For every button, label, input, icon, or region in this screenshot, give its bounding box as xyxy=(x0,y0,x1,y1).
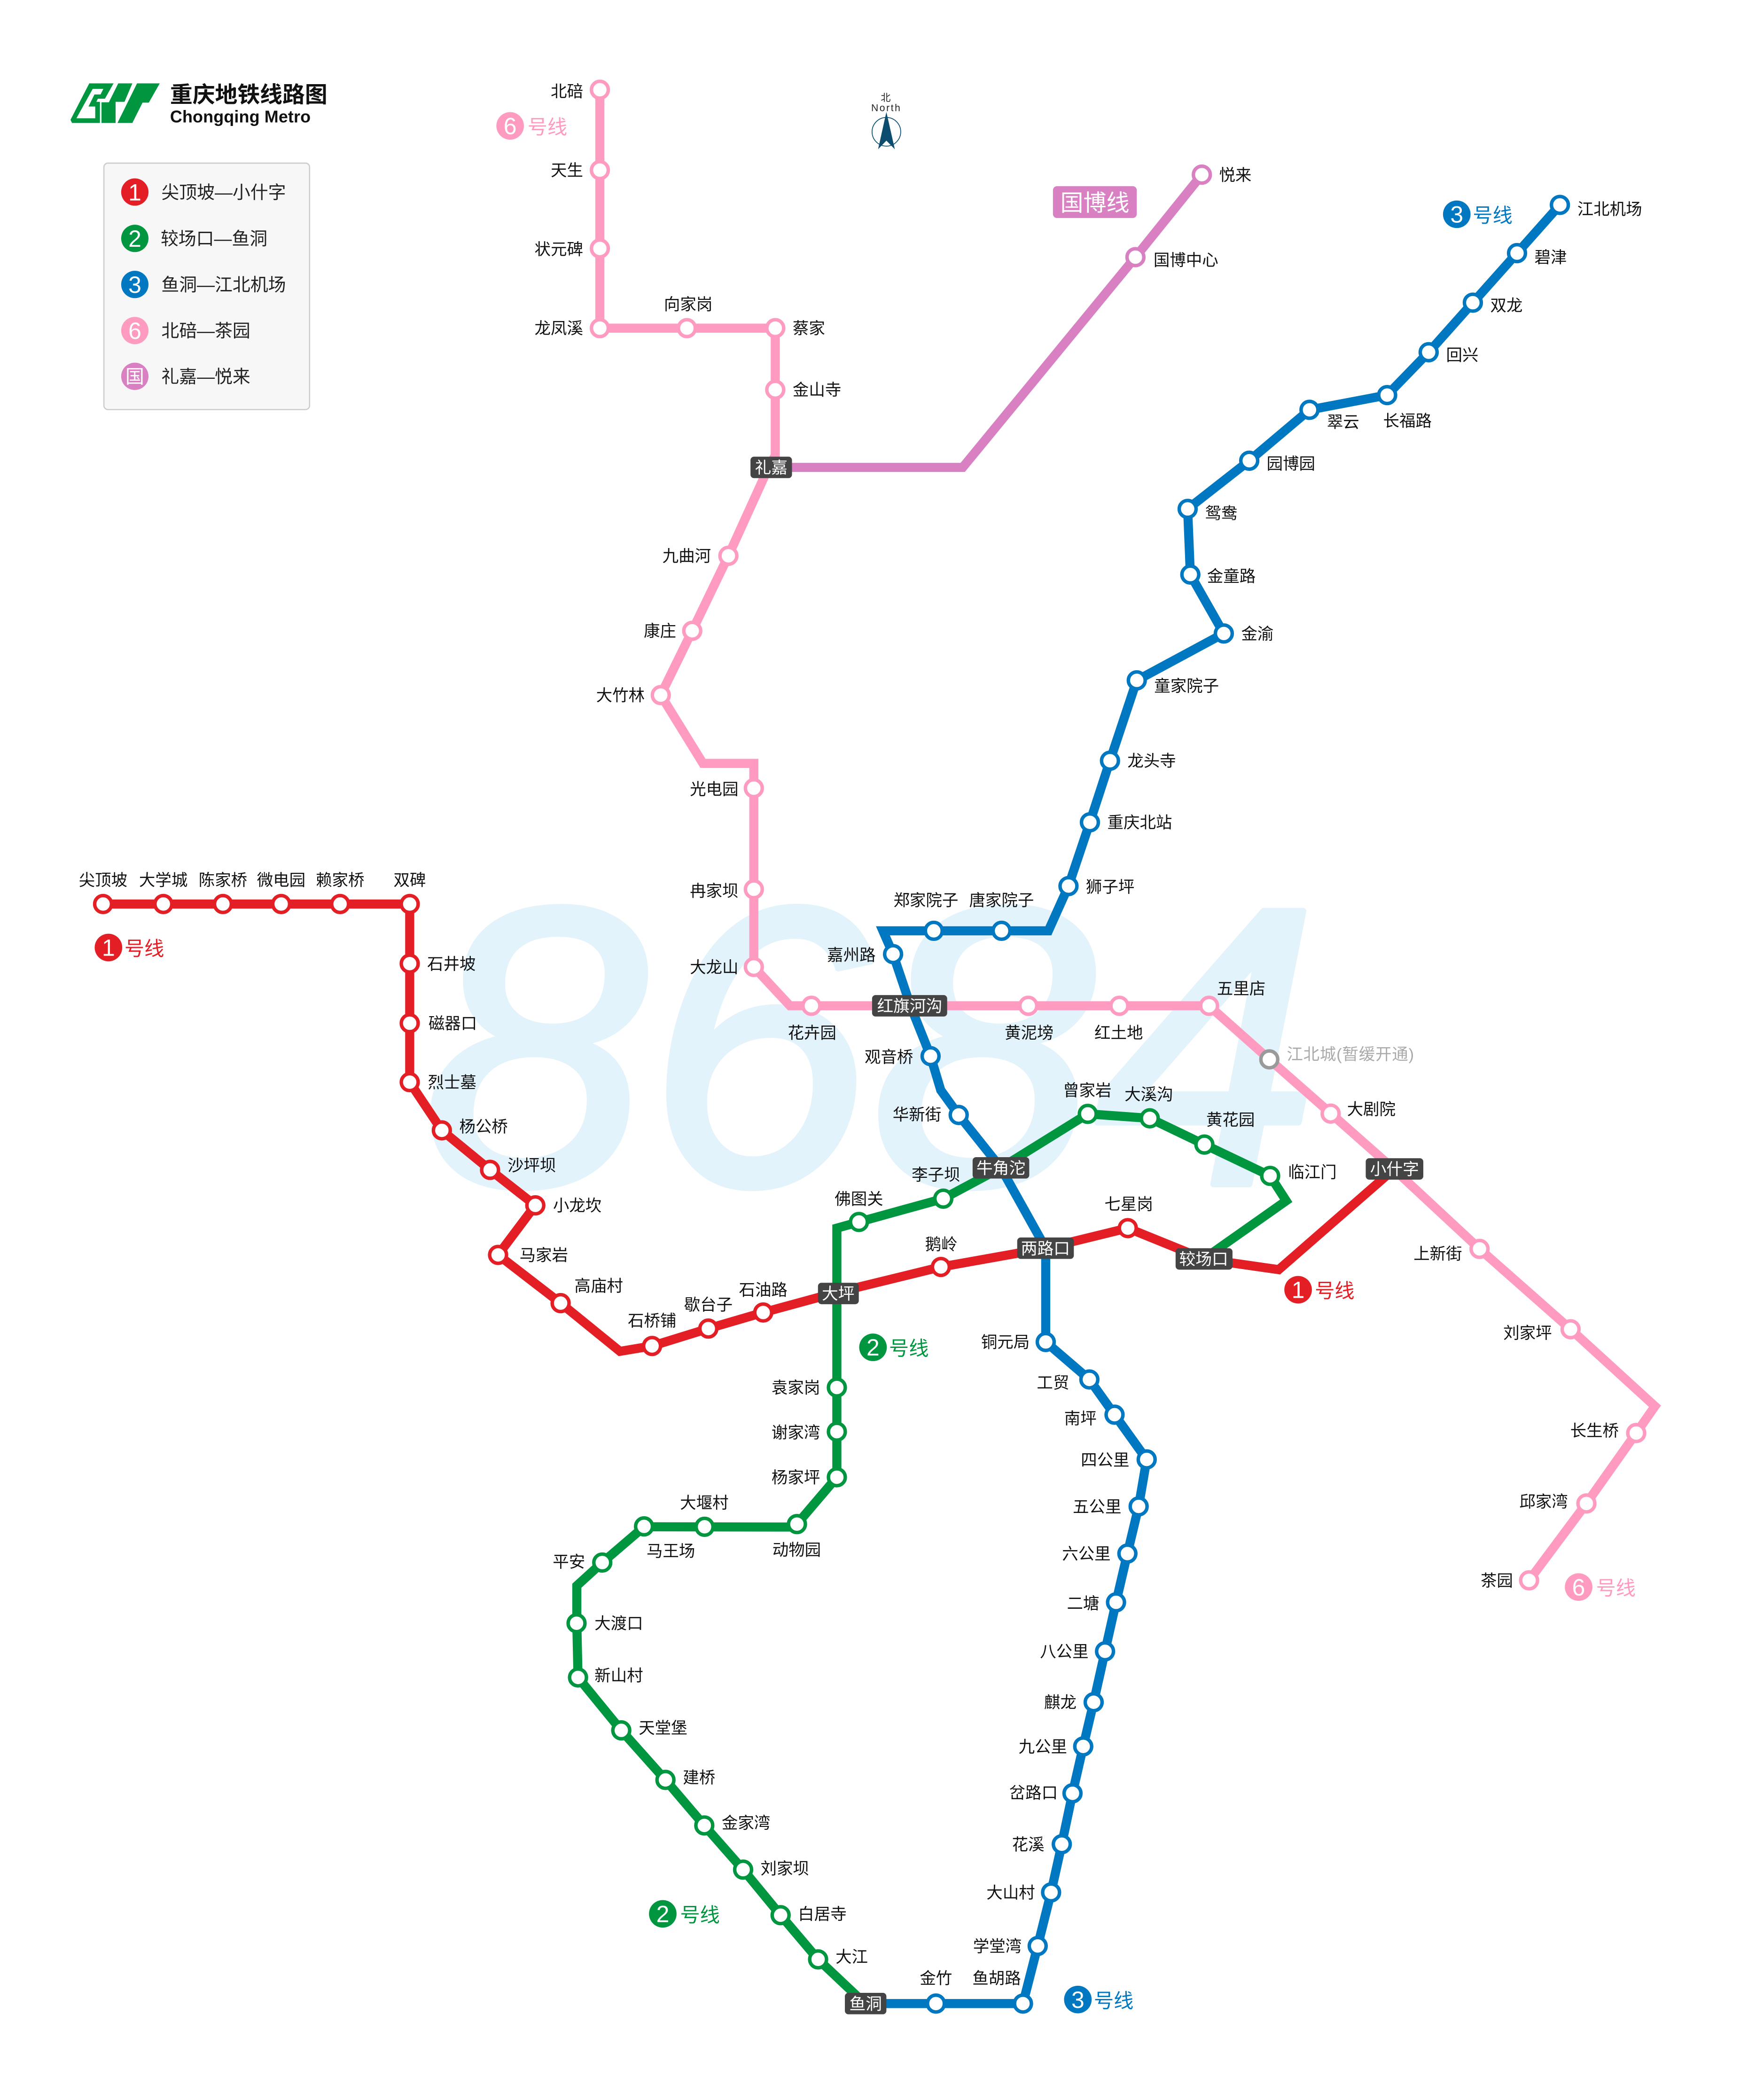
station 白居寺 xyxy=(772,1905,847,1924)
legend item: line 6: 6 xyxy=(128,318,141,344)
line label: 3号线 (north): 号线 xyxy=(1473,204,1513,227)
legend item: line 1 xyxy=(121,179,286,206)
station 天堂堡: 天堂堡 xyxy=(639,1719,687,1737)
station 杨公桥: 杨公桥 xyxy=(459,1118,508,1136)
interchange: 大坪: 大坪 xyxy=(822,1285,855,1303)
station 冉家坝 xyxy=(690,881,762,900)
station 金童路 xyxy=(1182,566,1256,586)
station 马家岩: 马家岩 xyxy=(520,1247,568,1265)
station 鹅岭 xyxy=(925,1236,958,1276)
line label: 2号线 (north): 2 xyxy=(866,1334,880,1361)
station 天生 xyxy=(551,162,609,180)
north arrow xyxy=(871,92,901,149)
station 李子坝 xyxy=(912,1167,960,1207)
line label: 2号线 (south) xyxy=(649,1900,720,1928)
legend item: Guobo line: 国 xyxy=(125,367,144,387)
station 江北城 (suspended): 江北城(暂缓开通) xyxy=(1287,1046,1414,1064)
station 翠云: 翠云 xyxy=(1327,414,1359,431)
station 马王场: 马王场 xyxy=(647,1543,695,1560)
station 康庄 xyxy=(644,622,701,641)
interchange: 礼嘉: 礼嘉 xyxy=(755,459,788,477)
station 陈家桥: 陈家桥 xyxy=(199,872,247,890)
station 金竹 xyxy=(920,1970,952,2012)
station 南坪 xyxy=(1064,1406,1123,1428)
station 九曲河: 九曲河 xyxy=(663,548,711,565)
station 大剧院 xyxy=(1322,1101,1396,1122)
station 观音桥 xyxy=(865,1048,939,1066)
station 歇台子: 歇台子 xyxy=(684,1296,733,1314)
station 九公里: 九公里 xyxy=(1019,1738,1067,1756)
station 五里店 xyxy=(1201,980,1265,1014)
station 大山村: 大山村 xyxy=(986,1884,1035,1902)
station 刘家坝 xyxy=(735,1860,809,1878)
station 四公里 xyxy=(1081,1451,1155,1469)
station 磁器口 xyxy=(401,1015,477,1033)
station 状元碑: 状元碑 xyxy=(535,241,583,259)
station 长生桥: 长生桥 xyxy=(1570,1422,1619,1440)
station 大江 xyxy=(810,1949,868,1968)
interchange: 两路口: 两路口 xyxy=(1021,1239,1070,1258)
station 建桥: 建桥 xyxy=(683,1769,715,1787)
title: 重庆地铁线路图: 重庆地铁线路图 xyxy=(170,83,328,108)
station 四公里: 四公里 xyxy=(1081,1451,1130,1469)
north arrow: North xyxy=(871,103,900,114)
station 郑家院子: 郑家院子 xyxy=(893,892,958,909)
station 金山寺: 金山寺 xyxy=(793,382,841,400)
legend item: line 2: 较场口—鱼洞 xyxy=(161,229,267,249)
line label: 6号线 (north): 号线 xyxy=(528,116,567,138)
station 杨家坪: 杨家坪 xyxy=(772,1469,820,1487)
station 龙凤溪: 龙凤溪 xyxy=(535,320,583,338)
station 学堂湾: 学堂湾 xyxy=(973,1938,1022,1956)
station 麒龙 xyxy=(1044,1694,1102,1712)
legend item: line 2 xyxy=(121,225,267,252)
station 石桥铺 xyxy=(628,1312,676,1355)
station 长福路: 长福路 xyxy=(1383,412,1432,430)
station 石油路 xyxy=(739,1282,788,1321)
station 冉家坝: 冉家坝 xyxy=(690,882,738,900)
station 大溪沟 xyxy=(1124,1086,1173,1127)
interchange: 鱼洞 xyxy=(845,1993,886,2014)
station 红土地 xyxy=(1094,997,1143,1042)
station 大龙山 xyxy=(690,958,762,977)
station 悦来 xyxy=(1194,166,1251,185)
interchange: 礼嘉 xyxy=(750,457,792,478)
station 邱家湾 xyxy=(1519,1493,1595,1512)
station 花溪: 花溪 xyxy=(1012,1836,1045,1854)
station 翠云 xyxy=(1301,401,1359,431)
line label: 2号线 (north): 号线 xyxy=(889,1338,929,1360)
station 马家岩 xyxy=(490,1246,568,1265)
line label: 3号线 (south): 号线 xyxy=(1094,1990,1133,2012)
station 长福路 xyxy=(1379,387,1432,430)
station 鱼胡路: 鱼胡路 xyxy=(972,1970,1021,1988)
legend item: line 2: 2 xyxy=(128,226,141,252)
station 嘉州路: 嘉州路 xyxy=(827,947,876,964)
station 沙坪坝: 沙坪坝 xyxy=(507,1157,556,1175)
station 鹅岭: 鹅岭 xyxy=(925,1236,958,1254)
line label: 3号线 (north): 3 xyxy=(1450,202,1463,228)
station 天生: 天生 xyxy=(551,162,583,180)
route: Guobo line xyxy=(771,175,1202,467)
station 童家院子 xyxy=(1128,672,1219,695)
station 小龙坎 xyxy=(527,1197,601,1215)
station 鱼胡路 xyxy=(972,1970,1031,2012)
station 尖顶坡: 尖顶坡 xyxy=(79,872,127,890)
station 陈家桥 xyxy=(199,872,247,912)
station 六公里: 六公里 xyxy=(1062,1545,1111,1563)
legend item: line 3: 3 xyxy=(128,272,141,298)
station 龙凤溪 xyxy=(535,320,609,338)
station 北碚 xyxy=(551,81,609,101)
station 邱家湾: 邱家湾 xyxy=(1519,1493,1568,1511)
station 二塘 xyxy=(1067,1594,1124,1613)
north arrow: 北 xyxy=(881,92,890,103)
station 佛图关 xyxy=(835,1191,883,1230)
line label: 3号线 (north) xyxy=(1443,201,1513,228)
station 谢家湾: 谢家湾 xyxy=(772,1424,820,1442)
station 大学城: 大学城 xyxy=(139,872,187,890)
legend item: line 1: 1 xyxy=(128,179,141,205)
line label: 6号线 (north) xyxy=(496,112,567,140)
station 碧津: 碧津 xyxy=(1535,249,1567,267)
interchange: 红旗河沟: 红旗河沟 xyxy=(877,997,942,1016)
station 刘家坪: 刘家坪 xyxy=(1503,1324,1552,1342)
line label: 2号线 (south): 2 xyxy=(656,1901,669,1928)
legend item: line 6: 北碚—茶园 xyxy=(161,321,250,341)
subtitle: Chongqing Metro: Chongqing Metro xyxy=(170,108,311,126)
legend item: line 6 xyxy=(121,317,250,344)
station 江北机场 xyxy=(1552,196,1642,219)
station 悦来: 悦来 xyxy=(1219,167,1251,185)
station 五公里: 五公里 xyxy=(1073,1498,1121,1516)
station 园博园: 园博园 xyxy=(1267,455,1315,473)
station 五公里 xyxy=(1073,1498,1147,1516)
stations: line 1 xyxy=(79,872,1153,1355)
line label: 3号线 (south): 3 xyxy=(1071,1987,1085,2013)
station 双龙 xyxy=(1464,294,1522,315)
station 茶园 xyxy=(1481,1572,1537,1590)
station 向家岗: 向家岗 xyxy=(664,296,712,313)
station 大学城 xyxy=(139,872,187,912)
line label: 2号线 (south): 号线 xyxy=(680,1904,720,1926)
station 大渡口 xyxy=(568,1615,643,1633)
station 高庙村 xyxy=(552,1277,623,1312)
station 大竹林 xyxy=(596,687,669,705)
station 金山寺 xyxy=(767,381,841,400)
station 烈士墓: 烈士墓 xyxy=(428,1074,476,1092)
station 六公里 xyxy=(1062,1545,1136,1563)
station 童家院子: 童家院子 xyxy=(1154,677,1219,695)
interchange: 牛角沱: 牛角沱 xyxy=(976,1159,1025,1177)
station 花溪 xyxy=(1012,1836,1070,1854)
station 临江门: 临江门 xyxy=(1288,1164,1337,1182)
line label: 国博线 xyxy=(1053,186,1137,218)
interchange: 小什字: 小什字 xyxy=(1370,1160,1419,1179)
station 回兴: 回兴 xyxy=(1446,347,1478,365)
station 回兴 xyxy=(1420,344,1478,365)
station 光电园: 光电园 xyxy=(690,781,738,799)
station 大溪沟: 大溪沟 xyxy=(1124,1086,1173,1104)
station 李子坝: 李子坝 xyxy=(912,1167,960,1184)
interchange: 鱼洞: 鱼洞 xyxy=(849,1995,882,2013)
station 工贸 xyxy=(1037,1371,1098,1392)
station 重庆北站: 重庆北站 xyxy=(1108,814,1172,832)
station 大江: 大江 xyxy=(835,1949,868,1967)
station 金家湾 xyxy=(696,1815,770,1834)
station 狮子坪: 狮子坪 xyxy=(1086,878,1134,896)
station 蔡家: 蔡家 xyxy=(793,320,825,338)
station 华新街: 华新街 xyxy=(893,1106,941,1124)
station 金家湾: 金家湾 xyxy=(722,1815,770,1833)
line label: 6号线 (north): 6 xyxy=(504,113,517,140)
station 郑家院子 xyxy=(893,892,958,939)
route: line 3 xyxy=(865,205,1560,2004)
station 华新街 xyxy=(893,1106,967,1124)
station 国博中心: 国博中心 xyxy=(1154,251,1218,269)
station 石井坡 xyxy=(401,955,476,973)
station 向家岗 xyxy=(664,296,712,337)
station 龙头寺 xyxy=(1101,752,1176,770)
station 金童路: 金童路 xyxy=(1207,568,1256,586)
station 大剧院: 大剧院 xyxy=(1347,1101,1396,1119)
station 南坪: 南坪 xyxy=(1064,1410,1097,1428)
station 学堂湾 xyxy=(973,1937,1046,1956)
station 曾家岩 xyxy=(1063,1082,1111,1122)
legend panel xyxy=(104,163,310,409)
station 建桥 xyxy=(657,1769,715,1788)
station 唐家院子: 唐家院子 xyxy=(969,892,1034,909)
station 杨家坪 xyxy=(772,1469,845,1487)
station 七星岗 xyxy=(1104,1196,1153,1237)
stations: Guobo line xyxy=(1127,166,1251,269)
station 动物园 xyxy=(773,1516,821,1559)
station 天堂堡 xyxy=(613,1719,687,1739)
line label: 国博线: 国博线 xyxy=(1061,191,1130,216)
station 新山村: 新山村 xyxy=(594,1667,643,1685)
station 麒龙: 麒龙 xyxy=(1044,1694,1077,1712)
station 袁家岗: 袁家岗 xyxy=(772,1379,820,1397)
station 微电园: 微电园 xyxy=(257,872,305,890)
line label: 6号线 (south): 号线 xyxy=(1596,1577,1636,1599)
station 鸳鸯 xyxy=(1179,501,1237,523)
station 谢家湾 xyxy=(772,1423,845,1442)
station 二塘: 二塘 xyxy=(1067,1595,1099,1613)
station 石油路: 石油路 xyxy=(739,1282,788,1300)
station 岔路口 xyxy=(1009,1785,1081,1802)
station 平安: 平安 xyxy=(553,1553,585,1571)
station 微电园 xyxy=(257,872,305,912)
station 小龙坎: 小龙坎 xyxy=(553,1197,601,1215)
station 江北城 (suspended) xyxy=(1261,1046,1414,1068)
station 赖家桥: 赖家桥 xyxy=(316,872,364,890)
station 金竹: 金竹 xyxy=(920,1970,952,1988)
station 八公里: 八公里 xyxy=(1040,1643,1089,1661)
line label: 1号线 (west): 号线 xyxy=(125,938,164,960)
station 金渝: 金渝 xyxy=(1241,625,1273,643)
station 金渝 xyxy=(1215,625,1273,643)
station 国博中心 xyxy=(1127,249,1218,269)
station 黄花园 xyxy=(1196,1112,1255,1153)
station 大堰村 xyxy=(680,1495,729,1535)
station 花卉园 xyxy=(788,997,836,1042)
station 铜元局 xyxy=(981,1333,1054,1352)
station 上新街 xyxy=(1413,1240,1488,1263)
station 刘家坝: 刘家坝 xyxy=(761,1860,809,1878)
route: line 1 xyxy=(103,904,1394,1351)
route: line 2 xyxy=(577,1114,1286,2004)
station 歇台子 xyxy=(684,1296,733,1337)
interchange: 大坪 xyxy=(818,1283,859,1304)
legend item: Guobo line xyxy=(121,363,250,390)
station 马王场 xyxy=(636,1518,695,1560)
station 花卉园: 花卉园 xyxy=(788,1024,836,1042)
station 康庄: 康庄 xyxy=(644,623,676,641)
station 磁器口: 磁器口 xyxy=(429,1015,477,1033)
line label: 1号线 (east): 1 xyxy=(1292,1277,1304,1303)
station 平安 xyxy=(553,1553,611,1571)
station 大山村 xyxy=(986,1884,1060,1902)
station 大龙山: 大龙山 xyxy=(690,959,738,977)
station 刘家坪 xyxy=(1503,1321,1579,1342)
line label: 1号线 (west) xyxy=(94,934,164,961)
station 北碚: 北碚 xyxy=(551,83,583,101)
station 岔路口: 岔路口 xyxy=(1009,1785,1058,1802)
line label: 1号线 (east): 号线 xyxy=(1315,1280,1355,1302)
station 碧津 xyxy=(1509,245,1567,267)
station 沙坪坝 xyxy=(482,1157,556,1178)
legend item: Guobo line: 礼嘉—悦来 xyxy=(161,367,250,387)
interchange: 较场口: 较场口 xyxy=(1179,1250,1228,1269)
stations: line 6 xyxy=(535,81,1645,1590)
line label: 2号线 (north) xyxy=(859,1333,929,1361)
logo: Chongqing Metro emblem xyxy=(70,83,160,123)
route: line 6 xyxy=(600,90,1655,1580)
line label: 6号线 (south) xyxy=(1565,1573,1636,1601)
station 杨公桥 xyxy=(433,1118,508,1139)
station 状元碑 xyxy=(535,240,609,259)
station 佛图关: 佛图关 xyxy=(835,1191,883,1208)
station 尖顶坡 xyxy=(79,872,127,912)
stations: line 2 xyxy=(553,1082,1337,1968)
station 七星岗: 七星岗 xyxy=(1104,1196,1153,1214)
station 蔡家 xyxy=(767,320,825,338)
station 大堰村: 大堰村 xyxy=(680,1495,729,1512)
station 观音桥: 观音桥 xyxy=(865,1049,913,1066)
station 临江门 xyxy=(1262,1164,1337,1184)
station 江北机场: 江北机场 xyxy=(1577,201,1642,219)
station 上新街: 上新街 xyxy=(1413,1246,1462,1263)
station 唐家院子 xyxy=(969,892,1034,939)
legend item: line 3: 鱼洞—江北机场 xyxy=(161,275,286,295)
station 狮子坪 xyxy=(1060,878,1134,896)
watermark 8684: 8684 xyxy=(423,825,1319,1268)
station 园博园 xyxy=(1241,452,1315,473)
station 双碑 xyxy=(393,872,426,912)
station 大渡口: 大渡口 xyxy=(594,1615,643,1633)
station 八公里 xyxy=(1040,1643,1114,1661)
line label: 6号线 (south): 6 xyxy=(1572,1574,1585,1600)
station 茶园: 茶园 xyxy=(1481,1572,1513,1590)
station 长生桥 xyxy=(1570,1422,1645,1442)
station 五里店: 五里店 xyxy=(1217,980,1265,998)
legend item: line 3 xyxy=(121,271,286,298)
station 大竹林: 大竹林 xyxy=(596,687,645,705)
station 黄花园: 黄花园 xyxy=(1206,1112,1255,1129)
stations: line 3 xyxy=(827,196,1642,2012)
station 新山村 xyxy=(570,1667,643,1686)
station 九公里 xyxy=(1019,1738,1092,1756)
station 石井坡: 石井坡 xyxy=(427,956,476,973)
station 双龙: 双龙 xyxy=(1490,297,1522,315)
station 工贸: 工贸 xyxy=(1037,1374,1069,1392)
legend item: line 1: 尖顶坡—小什字 xyxy=(161,183,286,203)
line label: 1号线 (east) xyxy=(1284,1276,1355,1303)
line label: 3号线 (south) xyxy=(1064,1986,1133,2014)
station 曾家岩: 曾家岩 xyxy=(1063,1082,1111,1100)
station 赖家桥 xyxy=(316,872,364,912)
station 鸳鸯: 鸳鸯 xyxy=(1205,505,1237,523)
station 黄泥塝 xyxy=(1005,997,1053,1042)
station 嘉州路 xyxy=(827,946,902,964)
station 石桥铺: 石桥铺 xyxy=(628,1312,676,1330)
station 龙头寺: 龙头寺 xyxy=(1127,752,1176,770)
station 光电园 xyxy=(690,780,762,799)
station 白居寺: 白居寺 xyxy=(798,1905,847,1923)
station 黄泥塝: 黄泥塝 xyxy=(1005,1024,1053,1042)
station 烈士墓 xyxy=(401,1074,476,1092)
station 铜元局: 铜元局 xyxy=(981,1334,1030,1352)
station 红土地: 红土地 xyxy=(1094,1024,1143,1042)
station 高庙村: 高庙村 xyxy=(574,1277,623,1295)
station 动物园: 动物园 xyxy=(773,1541,821,1559)
line label: 1号线 (west): 1 xyxy=(102,935,115,961)
station 袁家岗 xyxy=(772,1379,845,1397)
station 九曲河 xyxy=(663,548,737,565)
station 双碑: 双碑 xyxy=(393,872,426,890)
